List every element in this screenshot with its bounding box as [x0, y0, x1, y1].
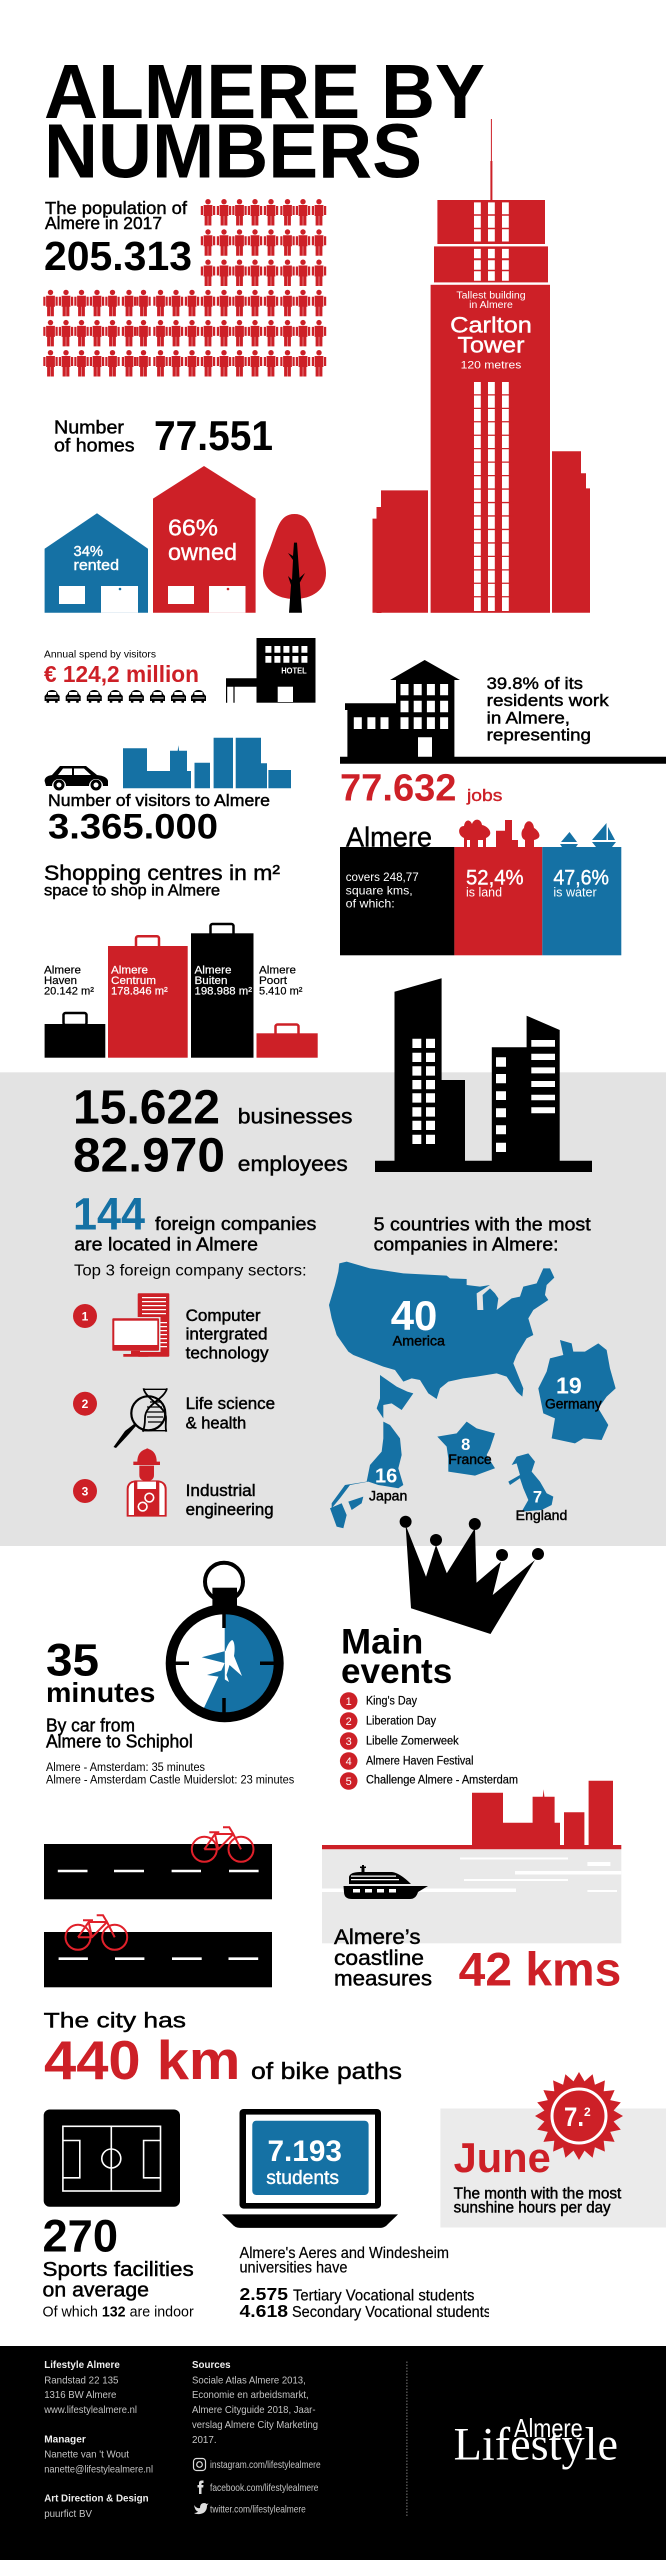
social links: facebook.com/lifestylealmere	[210, 2482, 319, 2494]
events list: Libelle Zomerweek	[366, 1735, 459, 1747]
businesses and employees figures: 15.622	[73, 1082, 220, 1134]
residents text: representing	[487, 726, 591, 745]
jobs figure: 77.632	[340, 768, 456, 810]
icon: big office buildings	[375, 978, 592, 1172]
icon: hotel	[226, 638, 316, 703]
businesses and employees figures: 82.970	[73, 1130, 225, 1182]
bag: Almere Poort: 5.410 m²	[259, 986, 303, 998]
panel: footer	[0, 2346, 666, 2560]
Lifestyle Almere logo: Almere	[514, 2413, 583, 2443]
bag: Almere Poort: Almere	[259, 964, 296, 976]
red skyline	[322, 1781, 621, 1849]
people icon grid	[43, 199, 326, 376]
sector 3: industrial engineering: Industrial	[186, 1482, 256, 1500]
visitor spend	[44, 648, 206, 703]
bag: Almere Haven: Almere	[44, 964, 81, 976]
icon: facebook	[198, 2480, 204, 2494]
map: Germany: Germany	[545, 1395, 602, 1411]
icon: magnifier and DNA	[114, 1388, 167, 1448]
sources column: verslag Almere City Marketing	[192, 2419, 318, 2431]
sources column: Sociale Atlas Almere 2013,	[192, 2374, 306, 2386]
universities text: 2.575	[240, 2284, 288, 2304]
shopping bag chart	[44, 924, 318, 1058]
icon: red trees and building	[459, 820, 539, 847]
events list: 2	[346, 1716, 352, 1728]
icon: sports field	[44, 2110, 180, 2207]
events list: 1	[346, 1696, 352, 1708]
tower caption: 120 metres	[461, 359, 522, 371]
icon: sun: 2	[584, 2105, 591, 2119]
bike paths text	[44, 2009, 402, 2091]
social links: twitter.com/lifestylealmere	[210, 2504, 306, 2516]
bag: Almere Haven: Haven	[44, 975, 77, 987]
sector 1: computer	[73, 1293, 269, 1363]
icon: laptop with students: 7.193	[268, 2135, 342, 2168]
shopping centres heading: space to shop in Almere	[44, 882, 220, 899]
events list: 5	[346, 1776, 352, 1788]
sports facilities text: Of which 132 are indoor	[42, 2304, 194, 2320]
map: France: 8	[461, 1436, 470, 1454]
bag: Almere Poort: Poort	[259, 975, 287, 987]
sources column	[192, 2359, 318, 2446]
number of homes	[54, 412, 273, 459]
businesses and employees figures: employees	[238, 1153, 348, 1176]
colophon column	[43, 2359, 153, 2520]
foreign companies: foreign companies	[155, 1213, 316, 1234]
coastline text: Almere’s	[334, 1926, 420, 1949]
map: Germany	[538, 1340, 616, 1443]
bag: Almere Centrum	[108, 936, 188, 1058]
tower caption: Carlton	[450, 312, 532, 338]
icon: sun	[535, 2072, 623, 2160]
foreign companies	[73, 1188, 316, 1280]
red segment: is land	[466, 885, 502, 900]
sources column: 2017.	[192, 2434, 217, 2446]
coastline text: coastline	[334, 1947, 424, 1970]
map: England: England	[516, 1507, 567, 1523]
population text: 205.313	[44, 233, 192, 279]
social links	[194, 2458, 321, 2516]
sources column: Economie en arbeidsmarkt,	[192, 2389, 309, 2401]
blue segment	[542, 847, 621, 955]
population text: The population of	[45, 198, 187, 218]
sector 2: life science: Life science	[186, 1395, 275, 1413]
colophon column: Manager	[44, 2434, 86, 2446]
events list: 4	[346, 1756, 352, 1768]
icon: instagram	[194, 2458, 206, 2470]
countries heading: companies in Almere:	[374, 1234, 558, 1255]
bag: Almere Buiten: 198.988 m²	[194, 986, 252, 998]
icon: blue house rented: rented	[74, 558, 119, 574]
sector 1: computer: intergrated	[186, 1326, 268, 1344]
social links: instagram.com/lifestylealmere	[210, 2459, 321, 2471]
icon: twitter	[194, 2503, 208, 2514]
map: France: France	[448, 1451, 492, 1467]
travel time text: Almere - Amsterdam Castle Muiderslot: 23 minutes	[46, 1775, 295, 1787]
residents text	[487, 674, 609, 745]
icon: red house owned: 66%	[168, 514, 218, 540]
events list: Liberation Day	[366, 1716, 436, 1728]
tower caption: Tower	[458, 332, 524, 358]
population text: Almere in 2017	[45, 213, 162, 233]
icon: blue house rented: 34%	[74, 544, 103, 560]
residents text: residents work	[487, 691, 609, 710]
icon: car	[45, 766, 108, 790]
universities text	[240, 2245, 491, 2321]
icon: hotel: HOTEL	[281, 666, 307, 675]
bag: Almere Centrum: 178.846 m²	[111, 986, 168, 998]
Almere label: Almere	[346, 822, 432, 853]
icon: office building	[340, 660, 666, 764]
road with bicycle 2	[44, 1915, 272, 1987]
sports facilities text: 270	[42, 2210, 118, 2262]
black segment: of which:	[346, 897, 395, 911]
universities text: universities have	[240, 2260, 348, 2276]
map: Germany: 19	[556, 1372, 582, 1398]
jobs figure: jobs	[466, 787, 502, 805]
bike paths text: 440 km	[44, 2029, 240, 2091]
number of homes: 77.551	[154, 412, 273, 459]
number of homes: of homes	[54, 436, 135, 456]
visitor spend: Annual spend by visitors	[44, 648, 156, 660]
coastline text	[334, 1926, 621, 1996]
blue segment: 47,6%	[553, 866, 609, 889]
universities text: Tertiary Vocational students	[293, 2288, 475, 2304]
sector 1: computer: technology	[186, 1345, 269, 1363]
sector 1: computer: 1	[82, 1310, 89, 1324]
bag: Almere Centrum: Centrum	[111, 975, 156, 987]
foreign companies: are located in Almere	[74, 1234, 258, 1255]
main events heading: Main	[341, 1622, 423, 1662]
map: Japan	[330, 1375, 413, 1528]
countries heading: 5 countries with the most	[374, 1214, 591, 1235]
icon: laptop with students	[222, 2109, 398, 2228]
panel: June sunshine: June	[454, 2134, 551, 2181]
travel time text	[46, 1634, 295, 1787]
visitor spend: € 124,2 million	[44, 661, 199, 687]
bike paths text: of bike paths	[251, 2058, 402, 2084]
sector 1: computer: Computer	[186, 1307, 261, 1325]
universities text: Secondary Vocational students	[292, 2304, 491, 2321]
events list: 3	[346, 1736, 352, 1748]
tower caption	[450, 291, 532, 371]
colophon column: Art Direction & Design	[44, 2493, 149, 2505]
events list	[340, 1692, 518, 1790]
visitors text: 3.365.000	[48, 808, 218, 846]
sports facilities text	[42, 2210, 194, 2320]
visitors text: Number of visitors to Almere	[48, 792, 270, 810]
icon: tree	[263, 514, 326, 613]
sector 2: life science: & health	[186, 1414, 246, 1432]
sports facilities text: Sports facilities	[42, 2258, 194, 2281]
coastline text: 42 kms	[459, 1942, 621, 1996]
sector 2: life science	[73, 1388, 275, 1448]
panel: June sunshine: sunshine hours per day	[454, 2200, 611, 2217]
tower caption: in Almere	[469, 300, 513, 311]
colophon column: nanette@lifestylealmere.nl	[44, 2463, 153, 2475]
icon: red house owned: owned	[168, 539, 237, 565]
icon: red house owned	[153, 466, 256, 613]
visitors text	[48, 792, 270, 846]
travel time text: 35	[46, 1634, 99, 1686]
coastline text: measures	[334, 1968, 432, 1991]
colophon column: Nanette van 't Wout	[44, 2448, 129, 2460]
icon: engineer	[127, 1448, 167, 1517]
bag: Almere Buiten	[191, 924, 254, 1058]
events list: King's Day	[366, 1695, 417, 1707]
black segment: square kms,	[346, 884, 413, 898]
bag: Almere Centrum: Almere	[111, 964, 148, 976]
travel time text: By car from	[46, 1716, 135, 1736]
sector 3: industrial engineering: 3	[82, 1484, 89, 1498]
businesses and employees figures	[73, 1082, 352, 1182]
map: America	[329, 1262, 554, 1399]
residents text: in Almere,	[487, 708, 570, 727]
icon: ship	[344, 1865, 428, 1899]
blue segment: is water	[553, 885, 597, 900]
icon: stopwatch with plane	[171, 1563, 279, 1717]
sector 3: industrial engineering	[73, 1448, 274, 1519]
Carlton Tower illustration	[372, 119, 590, 613]
title: NUMBERS	[44, 108, 422, 194]
bag: Almere Haven: 20.142 m²	[44, 986, 94, 998]
black segment	[340, 847, 454, 955]
icon: laptop with students: students	[266, 2168, 339, 2189]
bag: Almere Buiten: Buiten	[194, 975, 228, 987]
sources column: Sources	[192, 2359, 231, 2371]
main events heading: events	[341, 1652, 452, 1691]
foreign companies: Top 3 foreign company sectors:	[74, 1263, 307, 1280]
icon: computer	[111, 1293, 169, 1357]
number of homes: Number	[54, 417, 124, 437]
foreign companies: 144	[73, 1188, 145, 1240]
coastline illustration	[322, 1781, 621, 1943]
colophon column: 1316 BW Almere	[44, 2389, 117, 2401]
map: America: 40	[391, 1292, 437, 1339]
businesses and employees figures: businesses	[238, 1105, 352, 1128]
travel time text: Almere to Schiphol	[46, 1732, 193, 1752]
map: Japan: Japan	[369, 1488, 407, 1504]
universities text: 4.618	[240, 2301, 288, 2321]
sector 3: industrial engineering: engineering	[186, 1501, 274, 1519]
colophon column: Lifestyle Almere	[44, 2359, 120, 2371]
panel: June sunshine: The month with the most	[454, 2185, 622, 2202]
title: ALMERE BY	[44, 49, 485, 135]
panel: businesses	[0, 1072, 666, 1546]
map: England: 7	[533, 1488, 542, 1506]
colophon column: www.lifestylealmere.nl	[43, 2404, 137, 2416]
icon: blue boats	[560, 823, 616, 847]
countries heading	[374, 1214, 591, 1255]
Lifestyle Almere logo: Lifestyle	[454, 2418, 618, 2470]
map: England	[508, 1453, 567, 1523]
bag: Almere Haven	[44, 964, 105, 1058]
map: France	[437, 1422, 495, 1476]
icon: sun: 7.	[564, 2102, 584, 2132]
map: America: America	[393, 1333, 445, 1349]
universities text: Almere's Aeres and Windesheim	[240, 2245, 449, 2262]
sports facilities text: on average	[42, 2278, 149, 2302]
shopping centres heading: Shopping centres in m²	[44, 862, 280, 885]
icon: blue house rented	[45, 513, 148, 613]
population text	[44, 198, 192, 279]
red segment: 52,4%	[466, 866, 524, 889]
main events heading	[341, 1622, 452, 1691]
bike paths text: The city has	[44, 2009, 186, 2033]
tower caption: Tallest building	[456, 291, 526, 302]
events list: Almere Haven Festival	[366, 1756, 474, 1768]
map: Japan: 16	[375, 1465, 397, 1487]
blue city skyline	[123, 738, 291, 788]
row of cars	[45, 690, 206, 703]
Almere land and water panel	[340, 820, 621, 955]
shopping centres heading	[44, 862, 280, 899]
travel time text: Almere - Amsterdam: 35 minutes	[46, 1762, 205, 1774]
colophon column: Randstad 22 135	[44, 2374, 119, 2386]
residents text: 39.8% of its	[487, 674, 583, 693]
red segment	[454, 847, 542, 955]
icon: crown	[400, 1516, 544, 1634]
bag: Almere Buiten: Almere	[194, 964, 232, 976]
bag: Almere Poort	[256, 964, 318, 1058]
colophon column: puurfict BV	[44, 2508, 92, 2520]
sources column: Almere Cityguide 2018, Jaar-	[192, 2404, 316, 2416]
title	[44, 49, 485, 194]
black segment: covers 248,77	[346, 870, 419, 884]
panel: June sunshine	[440, 2072, 666, 2228]
events list: Challenge Almere - Amsterdam	[366, 1774, 518, 1786]
road with bicycle 1	[44, 1827, 272, 1899]
travel time text: minutes	[46, 1677, 155, 1708]
sector 2: life science: 2	[82, 1397, 89, 1411]
